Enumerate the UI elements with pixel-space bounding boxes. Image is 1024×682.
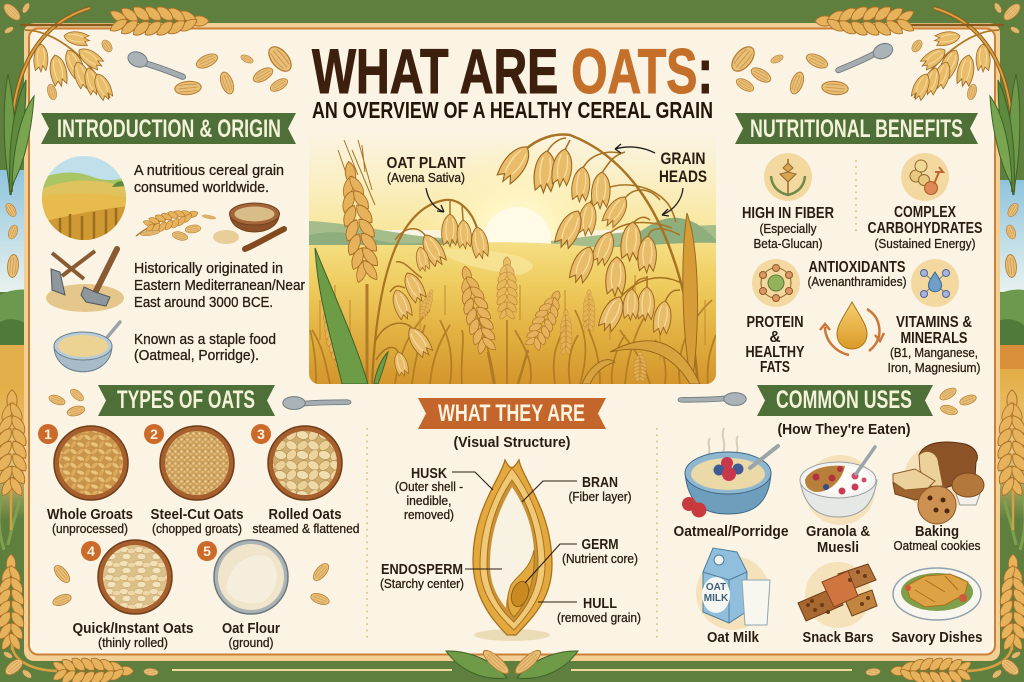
bottom centre leaf ornament (446, 647, 578, 679)
text: complex carbohydrates: (Sustained Energy) (874, 236, 976, 251)
panel: what they are (380, 398, 641, 641)
icon: savory dish plate (893, 568, 981, 620)
chart: oat field illustration (309, 130, 716, 384)
label: grain heads: HEADS (659, 167, 707, 186)
label: bran: (Fiber layer) (568, 490, 632, 504)
item: oat flour: Oat Flour (222, 621, 280, 637)
text: protein and healthy fats: HEALTHY (746, 344, 805, 361)
item: quick instant oats: (thinly rolled) (98, 635, 168, 650)
icon: snack bars (798, 562, 877, 628)
leaves (315, 213, 700, 384)
text: milk, bars, savory labels (707, 630, 982, 646)
decorative spoon and grains top left (126, 43, 295, 96)
text: antioxidants (808, 259, 906, 289)
decorative spoon and grains (678, 386, 978, 416)
label: germ (562, 537, 638, 566)
item: rolled oats: steamed & flattened (252, 521, 360, 536)
label: husk: HUSK (411, 466, 447, 482)
text: nutritious cereal grain: A nutritious cereal grain (134, 163, 284, 179)
item: whole groats: (unprocessed) (52, 521, 128, 536)
label: bran (568, 475, 632, 504)
icon: oat milk carton and glass: MILK (704, 593, 729, 604)
text: oatmeal, granola, baking labels: Oatmeal cookies (894, 539, 980, 553)
panel: introduction and origin (40, 113, 305, 372)
text: oatmeal, granola, baking labels: Muesli (817, 540, 859, 556)
heading: introduction (41, 113, 296, 144)
text: origin history (134, 261, 305, 311)
diagram: oat grain cross-section (473, 460, 552, 641)
text: oatmeal, granola, baking labels: Granola & (806, 524, 870, 540)
label: bran: BRAN (582, 475, 618, 491)
item: steel-cut oats: (chopped groats) (152, 521, 242, 536)
heading: introduction: INTRODUCTION & ORIGIN (57, 115, 281, 143)
label: germ: (Nutrient core) (562, 552, 638, 566)
heading: common uses: COMMON USES (776, 386, 912, 414)
heading: types of oats (98, 385, 275, 416)
text: high in fiber: Beta-Glucan) (754, 236, 822, 251)
text: complex carbohydrates: CARBOHYDRATES (868, 220, 982, 237)
icon: bowl of oats and scoop (213, 203, 284, 249)
item: oat flour: (ground) (228, 635, 274, 650)
text: high in fiber: (Especially (760, 221, 817, 236)
item: whole groats: 1 (44, 426, 52, 442)
item: whole groats: Whole Groats (47, 507, 133, 523)
text: vitamins and minerals: (B1, Manganese, (890, 345, 978, 360)
icon: vitamins molecule (911, 259, 959, 307)
bottom border lines (172, 669, 852, 671)
label: hull: (removed grain) (557, 611, 641, 625)
item: steel-cut oats: 2 (150, 426, 158, 442)
item: quick instant oats: 4 (87, 543, 95, 559)
side wheat bottom right (866, 390, 1024, 682)
text: antioxidants: ANTIOXIDANTS (808, 259, 906, 276)
icon: ancient tools (46, 249, 124, 312)
text: milk, bars, savory labels: Oat Milk (707, 630, 760, 646)
label: husk: (Outer shell - (395, 480, 463, 494)
text: vitamins and minerals: Iron, Magnesium) (888, 360, 980, 375)
text: protein and healthy fats: PROTEIN (746, 314, 804, 331)
subheading: how they're eaten: (How They're Eaten) (778, 421, 911, 438)
arrow: grain heads upper pointer (615, 144, 655, 153)
text: antioxidants: (Avenanthramides) (808, 274, 906, 289)
icon: baked goods (893, 442, 984, 524)
text: vitamins and minerals: MINERALS (900, 330, 968, 347)
text: origin history: Eastern Mediterranean/Near (134, 278, 305, 294)
text: complex carbohydrates (868, 204, 982, 251)
label: hull: HULL (583, 596, 617, 612)
text: nutritious cereal grain (134, 163, 284, 196)
text: staple food: (Oatmeal, Porridge). (134, 348, 259, 364)
item: rolled oats (251, 424, 360, 536)
subtitle: AN OVERVIEW OF A HEALTHY CEREAL GRAIN (312, 97, 713, 123)
decorative grains and spoon (48, 387, 351, 608)
text: origin history: Historically originated in (134, 261, 283, 277)
icon: antioxidants molecule (752, 259, 800, 307)
icon: oat milk carton and glass: OAT (706, 582, 726, 593)
panel: types of oats (38, 385, 360, 650)
item: whole groats (38, 424, 133, 536)
item: steel-cut oats: Steel-Cut Oats (150, 507, 244, 523)
text: protein and healthy fats: & (769, 329, 781, 346)
label: oat plant: (Avena Sativa) (387, 171, 465, 185)
text: origin history: East around 3000 BCE. (134, 295, 273, 311)
text: high in fiber: HIGH IN FIBER (742, 205, 834, 222)
right oat plant (494, 135, 698, 384)
text: protein and healthy fats: FATS (760, 359, 790, 376)
main wheat stem and head (331, 140, 571, 384)
icon: oat milk carton and glass (696, 548, 770, 630)
item: rolled oats: 3 (257, 426, 265, 442)
label: husk (395, 466, 463, 522)
label: husk: removed) (404, 508, 454, 522)
label: husk: inedible, (406, 494, 452, 508)
label: oat plant: OAT PLANT (386, 155, 466, 172)
text: complex carbohydrates: COMPLEX (894, 204, 957, 221)
icon: oil drop with cycle arrows (820, 302, 884, 355)
side wheat bottom left (0, 390, 158, 682)
icon: granola bowl (800, 447, 877, 525)
title (312, 37, 713, 123)
item: quick instant oats (72, 540, 194, 650)
text: protein and healthy fats (746, 314, 805, 376)
icon: fiber (764, 153, 812, 201)
panel: common uses (674, 385, 984, 646)
right scenery strip (996, 180, 1024, 520)
text: staple food: Known as a staple food (134, 332, 276, 348)
label: endosperm: ENDOSPERM (381, 562, 463, 578)
label: hull (557, 596, 641, 625)
text: staple food (134, 332, 276, 364)
heading: what they are: WHAT THEY ARE (438, 400, 585, 427)
text: oatmeal, granola, baking labels: Baking (915, 524, 959, 540)
label: endosperm: (Starchy center) (380, 577, 464, 591)
leader lines (452, 472, 577, 602)
main title: WHAT ARE OATS: (312, 37, 713, 107)
small wheat heads (315, 257, 648, 382)
corner wheat top right (815, 1, 1023, 278)
text: vitamins and minerals: VITAMINS & (896, 314, 972, 331)
arrow: oat plant pointer (426, 188, 444, 212)
item: quick instant oats: Quick/Instant Oats (72, 621, 194, 637)
label: grain heads (659, 149, 707, 186)
subheading: visual structure: (Visual Structure) (454, 434, 570, 451)
decorative spoon and grains top right (728, 41, 895, 96)
label: oat plant (386, 155, 466, 185)
icon: wheat sprig and grains (136, 203, 216, 242)
heading: common uses (757, 385, 933, 416)
label: germ: GERM (582, 537, 618, 553)
label: endosperm (380, 562, 464, 591)
corner wheat top left (1, 1, 209, 278)
text: milk, bars, savory labels: Savory Dishes (892, 630, 982, 646)
text: oatmeal, granola, baking labels: Oatmeal/Porridge (674, 524, 788, 540)
label: grain heads: GRAIN (660, 149, 706, 168)
text: nutritious cereal grain: consumed worldwide. (134, 180, 269, 196)
icon: porridge bowl (54, 322, 120, 372)
item: steel-cut oats (144, 424, 244, 536)
heading: types of oats: TYPES OF OATS (117, 386, 255, 414)
text: vitamins and minerals (888, 314, 980, 375)
item: rolled oats: Rolled Oats (268, 507, 342, 523)
text: high in fiber (742, 205, 834, 251)
left oat plant (372, 200, 490, 384)
panel: nutritional benefits (735, 113, 982, 376)
icon: farm field (42, 156, 126, 240)
text: oatmeal, granola, baking labels (674, 524, 980, 556)
arrow: grain heads lower pointer (662, 188, 683, 216)
heading: what they are (418, 398, 606, 429)
item: oat flour (197, 540, 288, 650)
left scenery strip (0, 170, 28, 520)
icon: carbohydrates (901, 153, 949, 201)
item: oat flour: 5 (203, 543, 211, 559)
background grain stalks (310, 275, 716, 384)
icon: oatmeal bowl (682, 428, 778, 518)
text: milk, bars, savory labels: Snack Bars (802, 630, 874, 646)
